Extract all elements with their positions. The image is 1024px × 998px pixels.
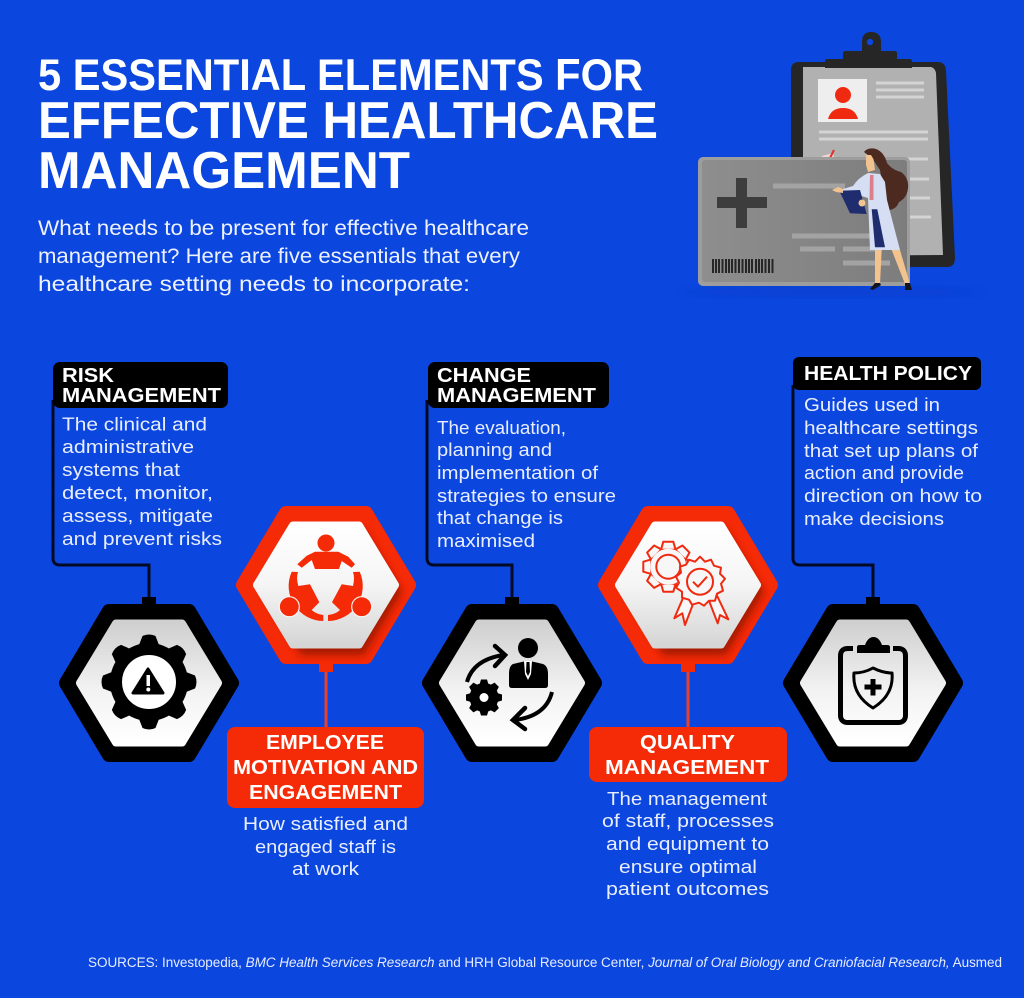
icon: clipboard with shield	[840, 637, 906, 722]
label box	[428, 362, 609, 408]
icon: gear and award rosette	[643, 542, 728, 625]
body text: systems that	[62, 460, 180, 480]
body text: assess, mitigate	[62, 506, 213, 526]
body text: and equipment to	[606, 834, 769, 854]
body text: The clinical and	[62, 414, 207, 434]
label box: HEALTH POLICY	[804, 362, 972, 385]
label box: EMPLOYEE	[266, 731, 384, 754]
title: EFFECTIVE HEALTHCARE	[38, 92, 658, 150]
label box	[227, 727, 424, 808]
connector	[324, 660, 328, 730]
icon: change cycle with person and gear	[466, 638, 552, 729]
label box	[793, 357, 981, 390]
hexagon	[66, 597, 232, 755]
body text: patient outcomes	[606, 879, 769, 899]
connector	[427, 400, 512, 600]
barcode	[713, 259, 772, 273]
clipboard	[791, 32, 955, 267]
body text: The management	[607, 789, 767, 809]
body text: maximised	[437, 531, 535, 551]
icon: team circle	[279, 534, 372, 621]
hexagon	[790, 597, 956, 755]
body text: engaged staff is	[255, 837, 396, 857]
label box: MANAGEMENT	[437, 384, 597, 407]
body text	[437, 418, 616, 551]
body text: administrative	[62, 437, 194, 457]
illustration: clipboard, medical card and doctor	[680, 32, 980, 297]
connector	[686, 660, 690, 730]
body text: strategies to ensure	[437, 486, 616, 506]
label box: MANAGEMENT	[62, 384, 222, 407]
panel: health policy	[790, 357, 982, 755]
body text: planning and	[437, 440, 552, 460]
label box: MOTIVATION AND	[233, 756, 418, 779]
panel: employee motivation and engagement	[227, 513, 424, 879]
body text: of staff, processes	[602, 811, 774, 831]
body text: and prevent risks	[62, 529, 222, 549]
label box: MANAGEMENT	[605, 756, 770, 779]
medical card	[698, 157, 910, 286]
icon: gear with warning	[102, 634, 196, 730]
body text: make decisions	[804, 509, 944, 529]
doctor	[832, 148, 912, 290]
body text	[602, 789, 774, 899]
body text	[243, 814, 408, 879]
label box: ENGAGEMENT	[249, 781, 402, 804]
label box: QUALITY	[640, 731, 735, 754]
label box: CHANGE	[437, 364, 531, 387]
body text: that set up plans of	[804, 441, 979, 461]
body text: detect, monitor,	[62, 483, 213, 503]
hexagon	[429, 597, 595, 755]
body text: action and provide	[804, 463, 964, 483]
body text: The evaluation,	[437, 418, 566, 438]
label box: RISK	[62, 364, 114, 387]
hexagon	[605, 513, 771, 672]
body text: implementation of	[437, 463, 599, 483]
intro text: What needs to be present for effective healthcare	[38, 217, 529, 240]
panel: change management	[427, 362, 616, 755]
intro text: healthcare setting needs to incorporate:	[38, 273, 470, 296]
sources: SOURCES: Investopedia, BMC Health Services Research and HRH Global Resource Center, Journal of Oral Biology and Craniofacial Research, Ausmed	[88, 955, 1002, 970]
body text: direction on how to	[804, 486, 982, 506]
body text: that change is	[437, 508, 563, 528]
cross	[717, 178, 767, 228]
intro text	[38, 217, 529, 296]
connector	[793, 385, 873, 600]
body text	[62, 414, 222, 549]
body text: ensure optimal	[619, 857, 757, 877]
body text: Guides used in	[804, 395, 940, 415]
connector	[53, 400, 149, 600]
body text	[804, 395, 982, 529]
panel: quality management	[589, 513, 787, 899]
panel: risk management	[53, 362, 232, 755]
intro text: management? Here are five essentials that every	[38, 245, 521, 268]
body text: How satisfied and	[243, 814, 408, 834]
title	[38, 51, 658, 200]
title: 5 ESSENTIAL ELEMENTS FOR	[38, 51, 643, 100]
body text: at work	[292, 859, 360, 879]
title: MANAGEMENT	[38, 142, 410, 200]
label box	[589, 727, 787, 782]
body text: healthcare settings	[804, 418, 978, 438]
label box	[53, 362, 228, 408]
hexagon	[243, 513, 409, 672]
